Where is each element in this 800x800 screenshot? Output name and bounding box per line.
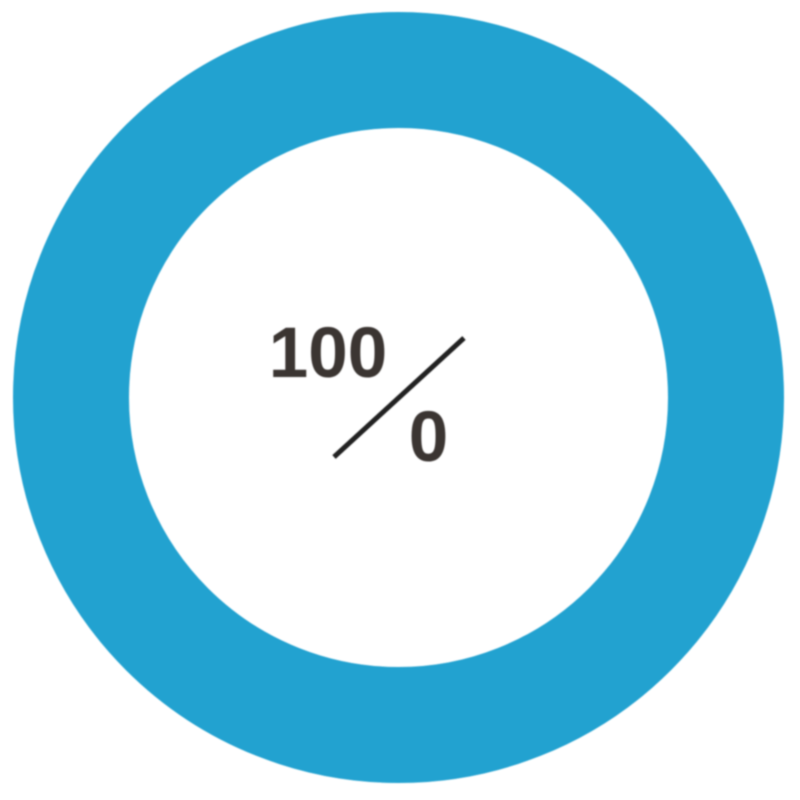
value: 0: 0 — [409, 398, 448, 477]
divider slash — [334, 338, 464, 457]
center label: 100 / 0 — [269, 314, 464, 477]
value: 100: 100 — [269, 314, 387, 393]
donut ring — [71, 70, 726, 725]
